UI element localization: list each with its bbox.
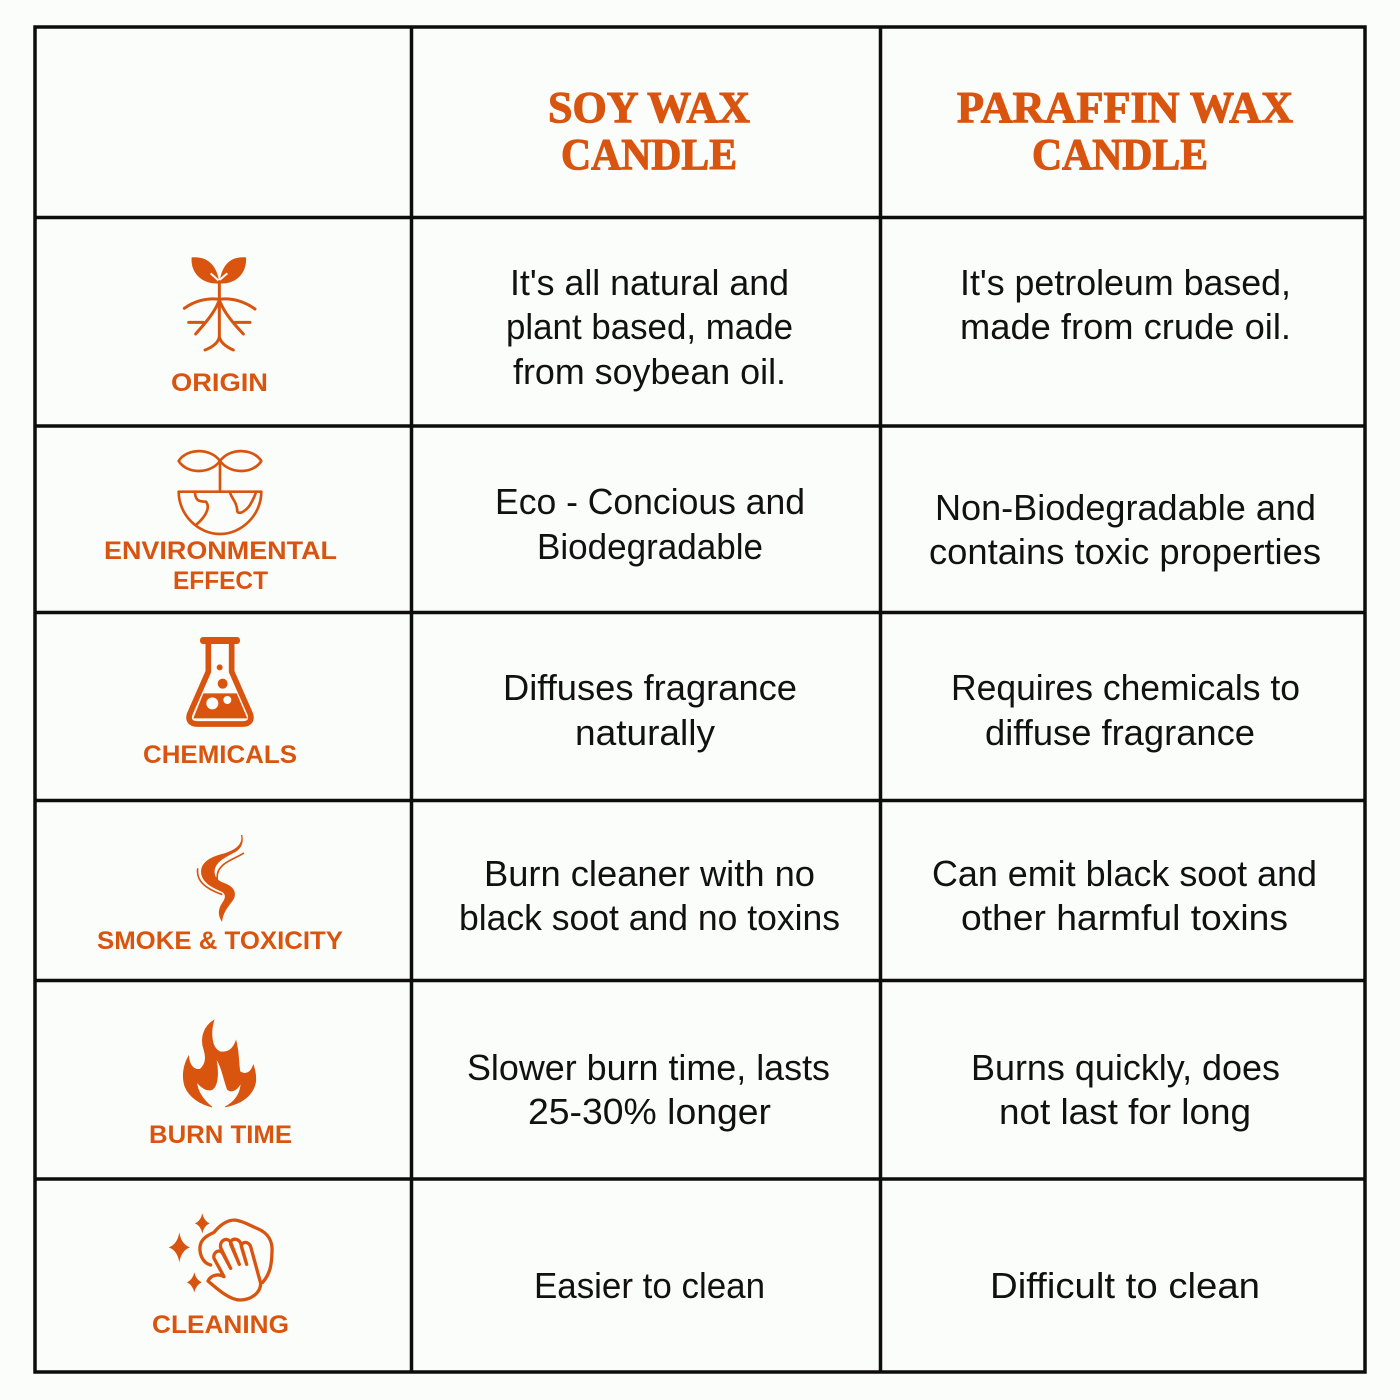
paraffin origin text — [960, 262, 1291, 347]
soy chemicals text — [503, 667, 797, 753]
soy burn time text: 25-30% longer — [528, 1091, 771, 1132]
soy environmental text: Eco - Concious and — [495, 481, 805, 522]
paraffin burn time text — [971, 1047, 1280, 1132]
row: smoke and toxicity — [97, 835, 1317, 955]
paraffin environmental text: contains toxic properties — [929, 531, 1321, 572]
paraffin smoke text — [932, 853, 1317, 938]
soy environmental text — [495, 481, 805, 567]
soy smoke text: black soot and no toxins — [459, 897, 840, 938]
paraffin origin text: It's petroleum based, — [960, 262, 1291, 303]
column heading: soy wax candle: SOY WAX — [548, 83, 750, 132]
paraffin smoke text: other harmful toxins — [961, 897, 1288, 938]
icon: globe with sprout — [179, 451, 261, 534]
icon: flame — [183, 1020, 256, 1107]
row: cleaning — [152, 1213, 1260, 1339]
icon: laboratory flask — [189, 637, 251, 724]
icon: hand wiping with sparkles — [169, 1213, 272, 1300]
column heading: paraffin wax candle: CANDLE — [1032, 130, 1208, 179]
paraffin cleaning text: Difficult to clean — [990, 1265, 1260, 1306]
icon: smoke wisp — [197, 835, 243, 920]
paraffin environmental text — [929, 487, 1321, 572]
label: origin: ORIGIN — [171, 369, 268, 397]
soy chemicals text: Diffuses fragrance — [503, 667, 797, 708]
column heading: soy wax candle: CANDLE — [561, 130, 737, 179]
soy chemicals text: naturally — [575, 712, 715, 753]
soy origin text: plant based, made — [506, 306, 793, 347]
label: cleaning: CLEANING — [152, 1311, 289, 1339]
label: environmental effect: EFFECT — [173, 567, 268, 595]
paraffin chemicals text: diffuse fragrance — [985, 712, 1255, 753]
row: origin — [171, 257, 1291, 397]
paraffin burn time text: not last for long — [999, 1091, 1251, 1132]
label: burn time: BURN TIME — [149, 1121, 292, 1149]
column heading: soy wax candle — [548, 83, 750, 179]
paraffin chemicals text: Requires chemicals to — [951, 667, 1300, 708]
label: smoke and toxicity: SMOKE & TOXICITY — [97, 927, 343, 955]
soy burn time text — [467, 1047, 830, 1132]
column heading: paraffin wax candle — [957, 83, 1293, 179]
row: burn time — [149, 1020, 1280, 1149]
soy origin text: from soybean oil. — [513, 351, 786, 392]
soy origin text: It's all natural and — [510, 262, 789, 303]
paraffin smoke text: Can emit black soot and — [932, 853, 1317, 894]
column heading: paraffin wax candle: PARAFFIN WAX — [957, 83, 1293, 132]
label: environmental effect: ENVIRONMENTAL — [104, 537, 337, 565]
row: chemicals — [143, 637, 1300, 769]
soy smoke text — [459, 853, 840, 938]
soy origin text — [506, 262, 793, 392]
paraffin origin text: made from crude oil. — [960, 306, 1291, 347]
paraffin environmental text: Non-Biodegradable and — [935, 487, 1316, 528]
paraffin chemicals text — [951, 667, 1300, 753]
soy burn time text: Slower burn time, lasts — [467, 1047, 830, 1088]
label: environmental effect — [104, 537, 337, 595]
soy smoke text: Burn cleaner with no — [484, 853, 815, 894]
icon: sprout with roots — [184, 257, 255, 350]
soy environmental text: Biodegradable — [537, 526, 763, 567]
row: environmental effect — [104, 451, 1321, 595]
soy cleaning text: Easier to clean — [534, 1265, 765, 1306]
label: chemicals: CHEMICALS — [143, 741, 297, 769]
paraffin burn time text: Burns quickly, does — [971, 1047, 1280, 1088]
